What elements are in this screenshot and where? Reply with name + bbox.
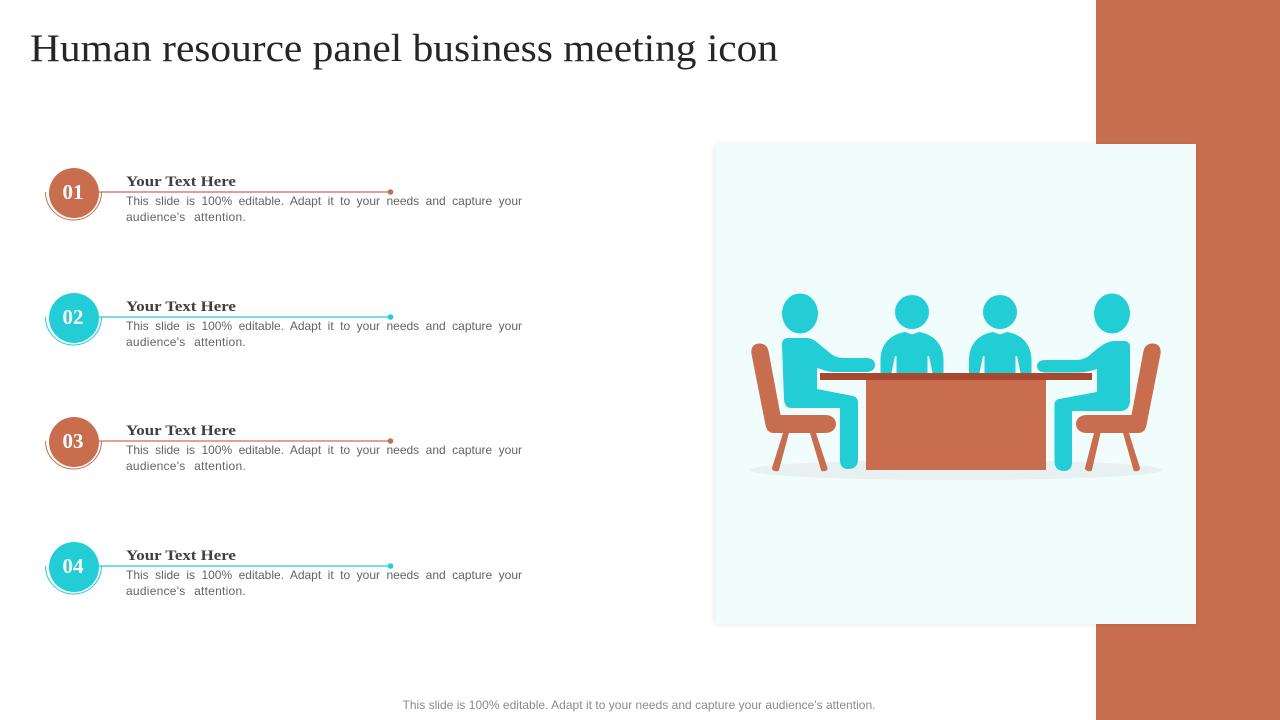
person: centre left bbox=[880, 295, 944, 373]
number 01: 01 bbox=[62, 180, 84, 204]
heading 04: Your Text Here bbox=[126, 547, 236, 564]
illustration: business meeting icon bbox=[750, 294, 1162, 480]
number 03 bbox=[49, 417, 99, 467]
number 04 bbox=[49, 542, 99, 592]
person: centre right bbox=[969, 295, 1032, 373]
text 01 bbox=[126, 194, 522, 224]
number 02 bbox=[49, 293, 99, 343]
text 03: audience's attention. bbox=[126, 459, 246, 473]
ring and connector 02 bbox=[45, 314, 394, 346]
person: far left bbox=[782, 294, 875, 469]
text 03: This slide is 100% editable. Adapt it to your needs and capture your bbox=[126, 443, 522, 457]
text 03 bbox=[126, 443, 522, 473]
heading 01: Your Text Here bbox=[126, 173, 236, 190]
person: far right bbox=[1037, 294, 1130, 471]
accent band bbox=[1096, 0, 1280, 720]
number 02: 02 bbox=[62, 305, 84, 329]
list item 03 bbox=[45, 417, 522, 473]
title: Human resource panel business meeting icon bbox=[30, 27, 778, 70]
number 03: 03 bbox=[62, 429, 84, 453]
ring and connector 04 bbox=[45, 563, 394, 594]
floor shadow bbox=[750, 460, 1162, 480]
number 04: 04 bbox=[62, 554, 84, 578]
heading 03: Your Text Here bbox=[126, 422, 236, 439]
left chair bbox=[751, 344, 836, 471]
table bbox=[820, 373, 1092, 470]
text 01: This slide is 100% editable. Adapt it to your needs and capture your bbox=[126, 194, 522, 208]
list item 04 bbox=[45, 542, 522, 598]
panel: illustration background bbox=[716, 144, 1196, 624]
text 04: audience's attention. bbox=[126, 584, 246, 598]
text 01: audience's attention. bbox=[126, 210, 246, 224]
ring and connector 01 bbox=[45, 189, 394, 220]
right chair bbox=[1076, 344, 1161, 471]
heading 02: Your Text Here bbox=[126, 298, 236, 315]
text 02: This slide is 100% editable. Adapt it to your needs and capture your bbox=[126, 319, 522, 333]
text 02: audience's attention. bbox=[126, 335, 246, 349]
list item 01 bbox=[45, 168, 522, 224]
number 01 bbox=[49, 168, 99, 218]
text 02 bbox=[126, 319, 522, 349]
ring and connector 03 bbox=[45, 438, 394, 470]
text 04 bbox=[126, 568, 522, 598]
list item 02 bbox=[45, 293, 522, 349]
footer note: This slide is 100% editable. Adapt it to your needs and capture your audience's attention. bbox=[402, 698, 876, 712]
text 04: This slide is 100% editable. Adapt it to your needs and capture your bbox=[126, 568, 522, 582]
